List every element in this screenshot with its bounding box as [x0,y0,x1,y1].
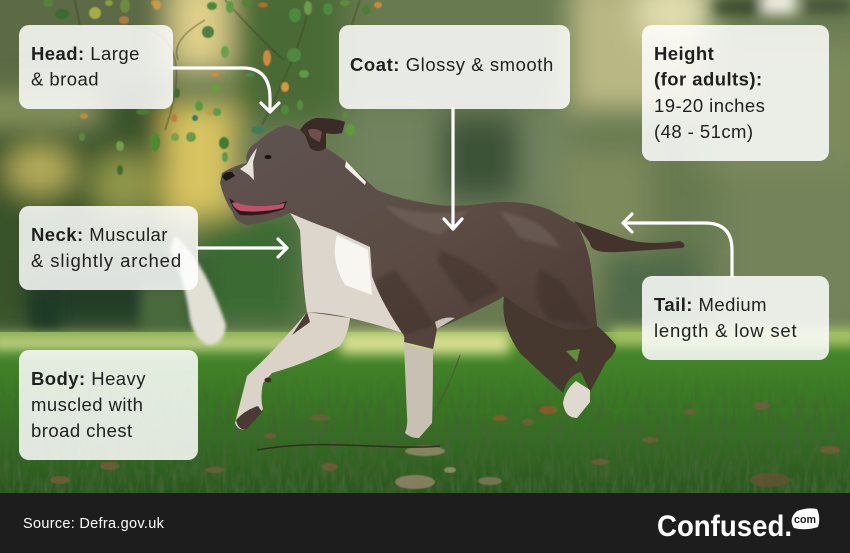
arrow: coat [444,109,462,229]
arrow: head [173,68,279,112]
body shading [375,250,590,335]
panel: neck: & slightly arched [31,250,182,271]
panel: body: Body: Heavy [31,368,146,389]
dog [220,118,685,438]
panel: body: muscled with [31,394,143,415]
logo: Confused.com: Confused. [657,510,792,543]
panel: neck [19,206,198,290]
panel: height: (for adults): [654,68,763,90]
gap between hind legs [566,349,580,362]
logo: Confused.com: com [794,514,816,526]
neck stripe [345,161,366,185]
panel: coat [339,25,570,109]
background: meadow [0,328,850,497]
background: blurred forest [0,0,850,340]
panel: body [19,350,198,460]
panel: coat: Coat: Glossy & smooth [350,54,554,75]
panel: head: & broad [31,68,99,90]
eye [264,155,272,159]
arrow: neck [198,239,287,257]
panel: height: Height [654,43,714,64]
hind legs [503,270,616,393]
white blurred shape behind neck box [170,235,226,345]
panel: neck: Neck: Muscular [31,224,168,245]
near front leg [235,312,350,429]
hind white foot [563,381,590,418]
panel: tail: length & low set [654,320,797,341]
tail [574,221,685,252]
panel: height: (48 - 51cm) [654,121,754,142]
panel: height: 19-20 inches [654,95,765,116]
second front leg [404,342,433,438]
panel: head [19,25,173,109]
panel: height [642,25,829,161]
belly white patch [435,318,455,329]
panel: head: Head: Large [31,43,140,64]
panel: tail: Tail: Medium [654,294,767,315]
panel: tail [642,276,829,360]
panel: body: broad chest [31,420,133,441]
arrow: tail [623,214,732,276]
branches and leaves [43,0,382,175]
head white blaze [240,148,257,180]
source text: Source: Defra.gov.uk [23,516,165,532]
white chest [290,213,402,333]
body and head [220,118,597,349]
footer bar [0,493,850,553]
muzzle and mouth [222,172,235,181]
ear [300,118,345,151]
